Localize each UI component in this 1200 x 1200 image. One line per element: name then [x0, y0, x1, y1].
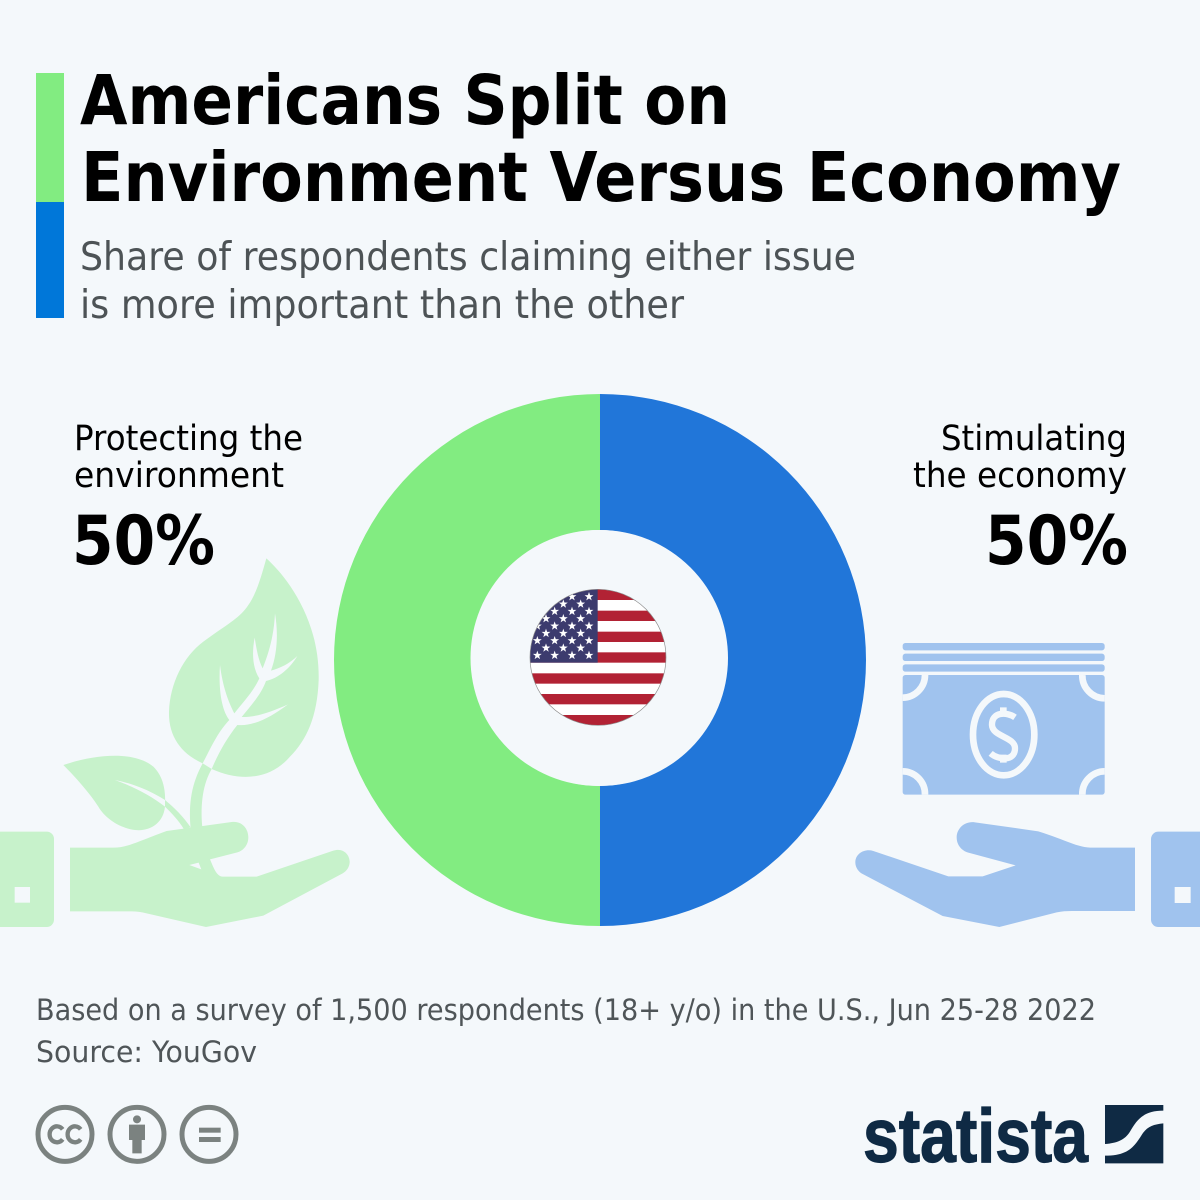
- title: [80, 61, 1121, 218]
- subtitle: Share of respondents claiming either issue: [80, 235, 856, 280]
- icon: creative commons licence: [38, 1107, 236, 1161]
- subtitle: [80, 235, 856, 328]
- icon: hand holding money: [855, 643, 1200, 927]
- statista logo: statista: [863, 1094, 1089, 1179]
- donut chart: [334, 394, 866, 926]
- left label: protecting the environment: environment: [74, 456, 284, 496]
- icon: hand holding plant: [0, 558, 350, 927]
- footnote and source: [36, 993, 1096, 1069]
- right label: stimulating the economy: Stimulating: [941, 419, 1127, 459]
- right label: stimulating the economy: the economy: [913, 456, 1127, 496]
- left label: protecting the environment: [72, 419, 303, 581]
- right label: stimulating the economy: 50%: [985, 502, 1128, 581]
- footnote and source: Based on a survey of 1,500 respondents (18+ y/o) in the U.S., Jun 25-28 2022: [36, 993, 1096, 1027]
- title: Americans Split on: [80, 61, 730, 141]
- left label: protecting the environment: Protecting the: [74, 419, 303, 459]
- accent bar: [36, 73, 64, 318]
- icon: US flag: [527, 587, 670, 730]
- left label: protecting the environment: 50%: [72, 502, 215, 581]
- footnote and source: Source: YouGov: [36, 1035, 257, 1069]
- subtitle: is more important than the other: [80, 283, 685, 328]
- right label: stimulating the economy: [913, 419, 1128, 581]
